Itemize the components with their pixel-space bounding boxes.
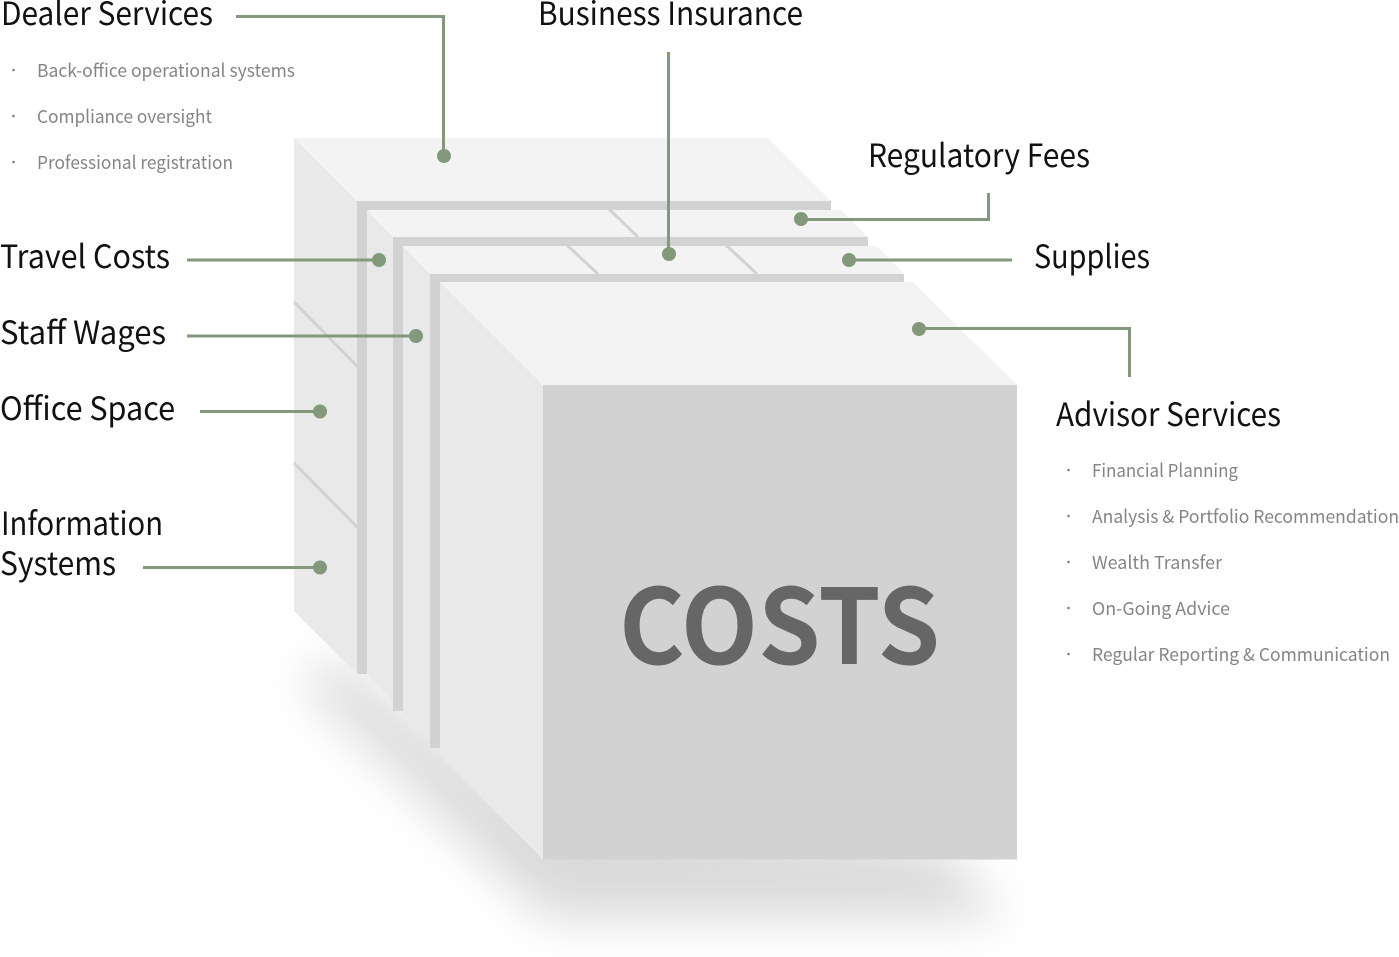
list: advisor services: [1067, 457, 1399, 667]
back layer: dealer services: [294, 138, 831, 674]
list: advisor services: Wealth Transfer: [1092, 549, 1223, 575]
list: advisor services: Financial Planning: [1092, 457, 1238, 483]
front layer: advisor services: [440, 282, 1017, 860]
callout: travel costs: Travel Costs: [0, 232, 170, 278]
callout: staff wages: Staff Wages: [0, 308, 166, 354]
callout: information systems: [0, 499, 327, 585]
list: advisor services: On-Going Advice: [1092, 595, 1230, 621]
callout: information systems: Information: [1, 499, 163, 545]
list: dealer services: [12, 57, 295, 175]
callout: business insurance: [538, 0, 803, 261]
callout: advisor services: Advisor Services: [1056, 390, 1281, 436]
cube drop shadow: [300, 660, 1005, 918]
callout: regulatory fees: [794, 131, 1090, 226]
callout: supplies: Supplies: [1034, 232, 1150, 278]
list: advisor services: Regular Reporting & Communication: [1092, 641, 1390, 667]
callout: office space: [0, 384, 327, 430]
callout: dealer services: [1, 0, 451, 163]
callout: information systems: Systems: [0, 539, 116, 585]
list: dealer services: Back-office operational systems: [37, 57, 295, 83]
third layer: supplies and staff wages: [403, 245, 904, 748]
callout: office space: Office Space: [0, 384, 175, 430]
cube illustration: [294, 138, 1017, 860]
list: dealer services: Compliance oversight: [37, 103, 212, 129]
callout: regulatory fees: Regulatory Fees: [868, 131, 1090, 177]
callout: staff wages: [0, 308, 423, 354]
callout: advisor services: [912, 322, 1281, 436]
costs label: COSTS: [619, 543, 940, 694]
list: dealer services: Professional registration: [37, 149, 233, 175]
callout: travel costs: [0, 232, 386, 278]
second layer: regulatory fees and travel costs: [367, 209, 868, 711]
callout: supplies: [842, 232, 1150, 278]
list: advisor services: Analysis & Portfolio Recommendation: [1092, 503, 1399, 529]
